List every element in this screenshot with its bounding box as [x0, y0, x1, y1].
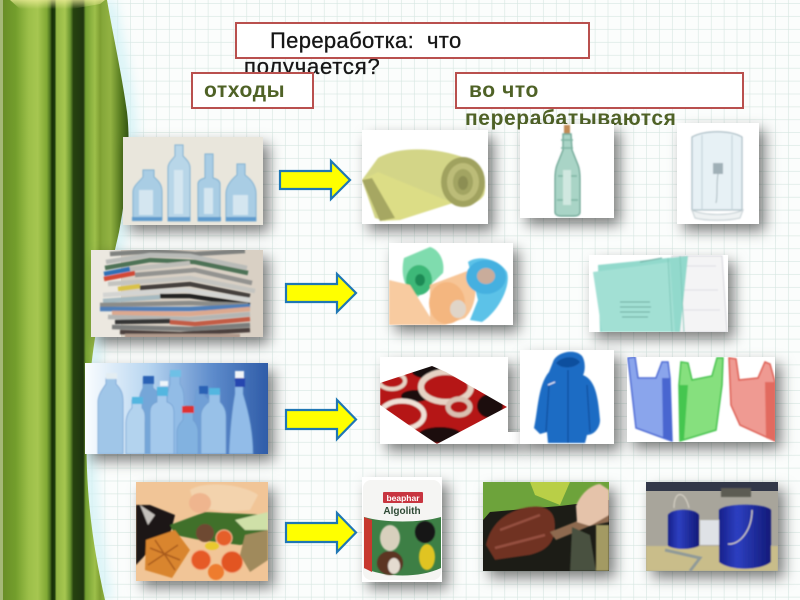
arrow 3 — [286, 400, 356, 439]
arrow 1 — [280, 161, 350, 199]
arrow 4 — [286, 513, 356, 552]
title second line, partly hidden: получается? — [244, 54, 380, 79]
photo: Algolith can: Algolith — [383, 506, 421, 517]
photo: glass bottles — [123, 137, 263, 225]
heading continuation: перерабатываются — [465, 107, 677, 130]
photo: blue tanks — [646, 482, 778, 571]
photo: food waste — [136, 482, 268, 581]
photo: plastic water bottles — [85, 363, 268, 454]
curtain — [0, 0, 130, 600]
heading: waste: отходы — [204, 79, 285, 102]
photo: Algolith can: beaphar — [386, 493, 420, 503]
photo: plastic bags — [627, 357, 775, 442]
photo: newspapers — [91, 250, 263, 337]
photo: blue jacket — [520, 350, 614, 444]
photo: Algolith can — [362, 477, 442, 582]
heading: what it becomes — [456, 73, 743, 108]
heading: what it becomes: во что — [469, 79, 539, 102]
photo: toilet paper rolls — [389, 243, 513, 325]
photo: green glass bottle — [520, 124, 614, 218]
photo: compost on a spade — [483, 482, 609, 571]
title text: Переработка: что — [270, 28, 462, 53]
photo: mineral wool roll — [362, 130, 488, 224]
title box — [236, 23, 589, 58]
photo: notebooks — [589, 255, 728, 332]
heading: waste — [192, 73, 313, 108]
photo: carpet — [379, 357, 520, 444]
arrow 2 — [286, 274, 356, 312]
photo: shower cabin — [677, 123, 759, 224]
